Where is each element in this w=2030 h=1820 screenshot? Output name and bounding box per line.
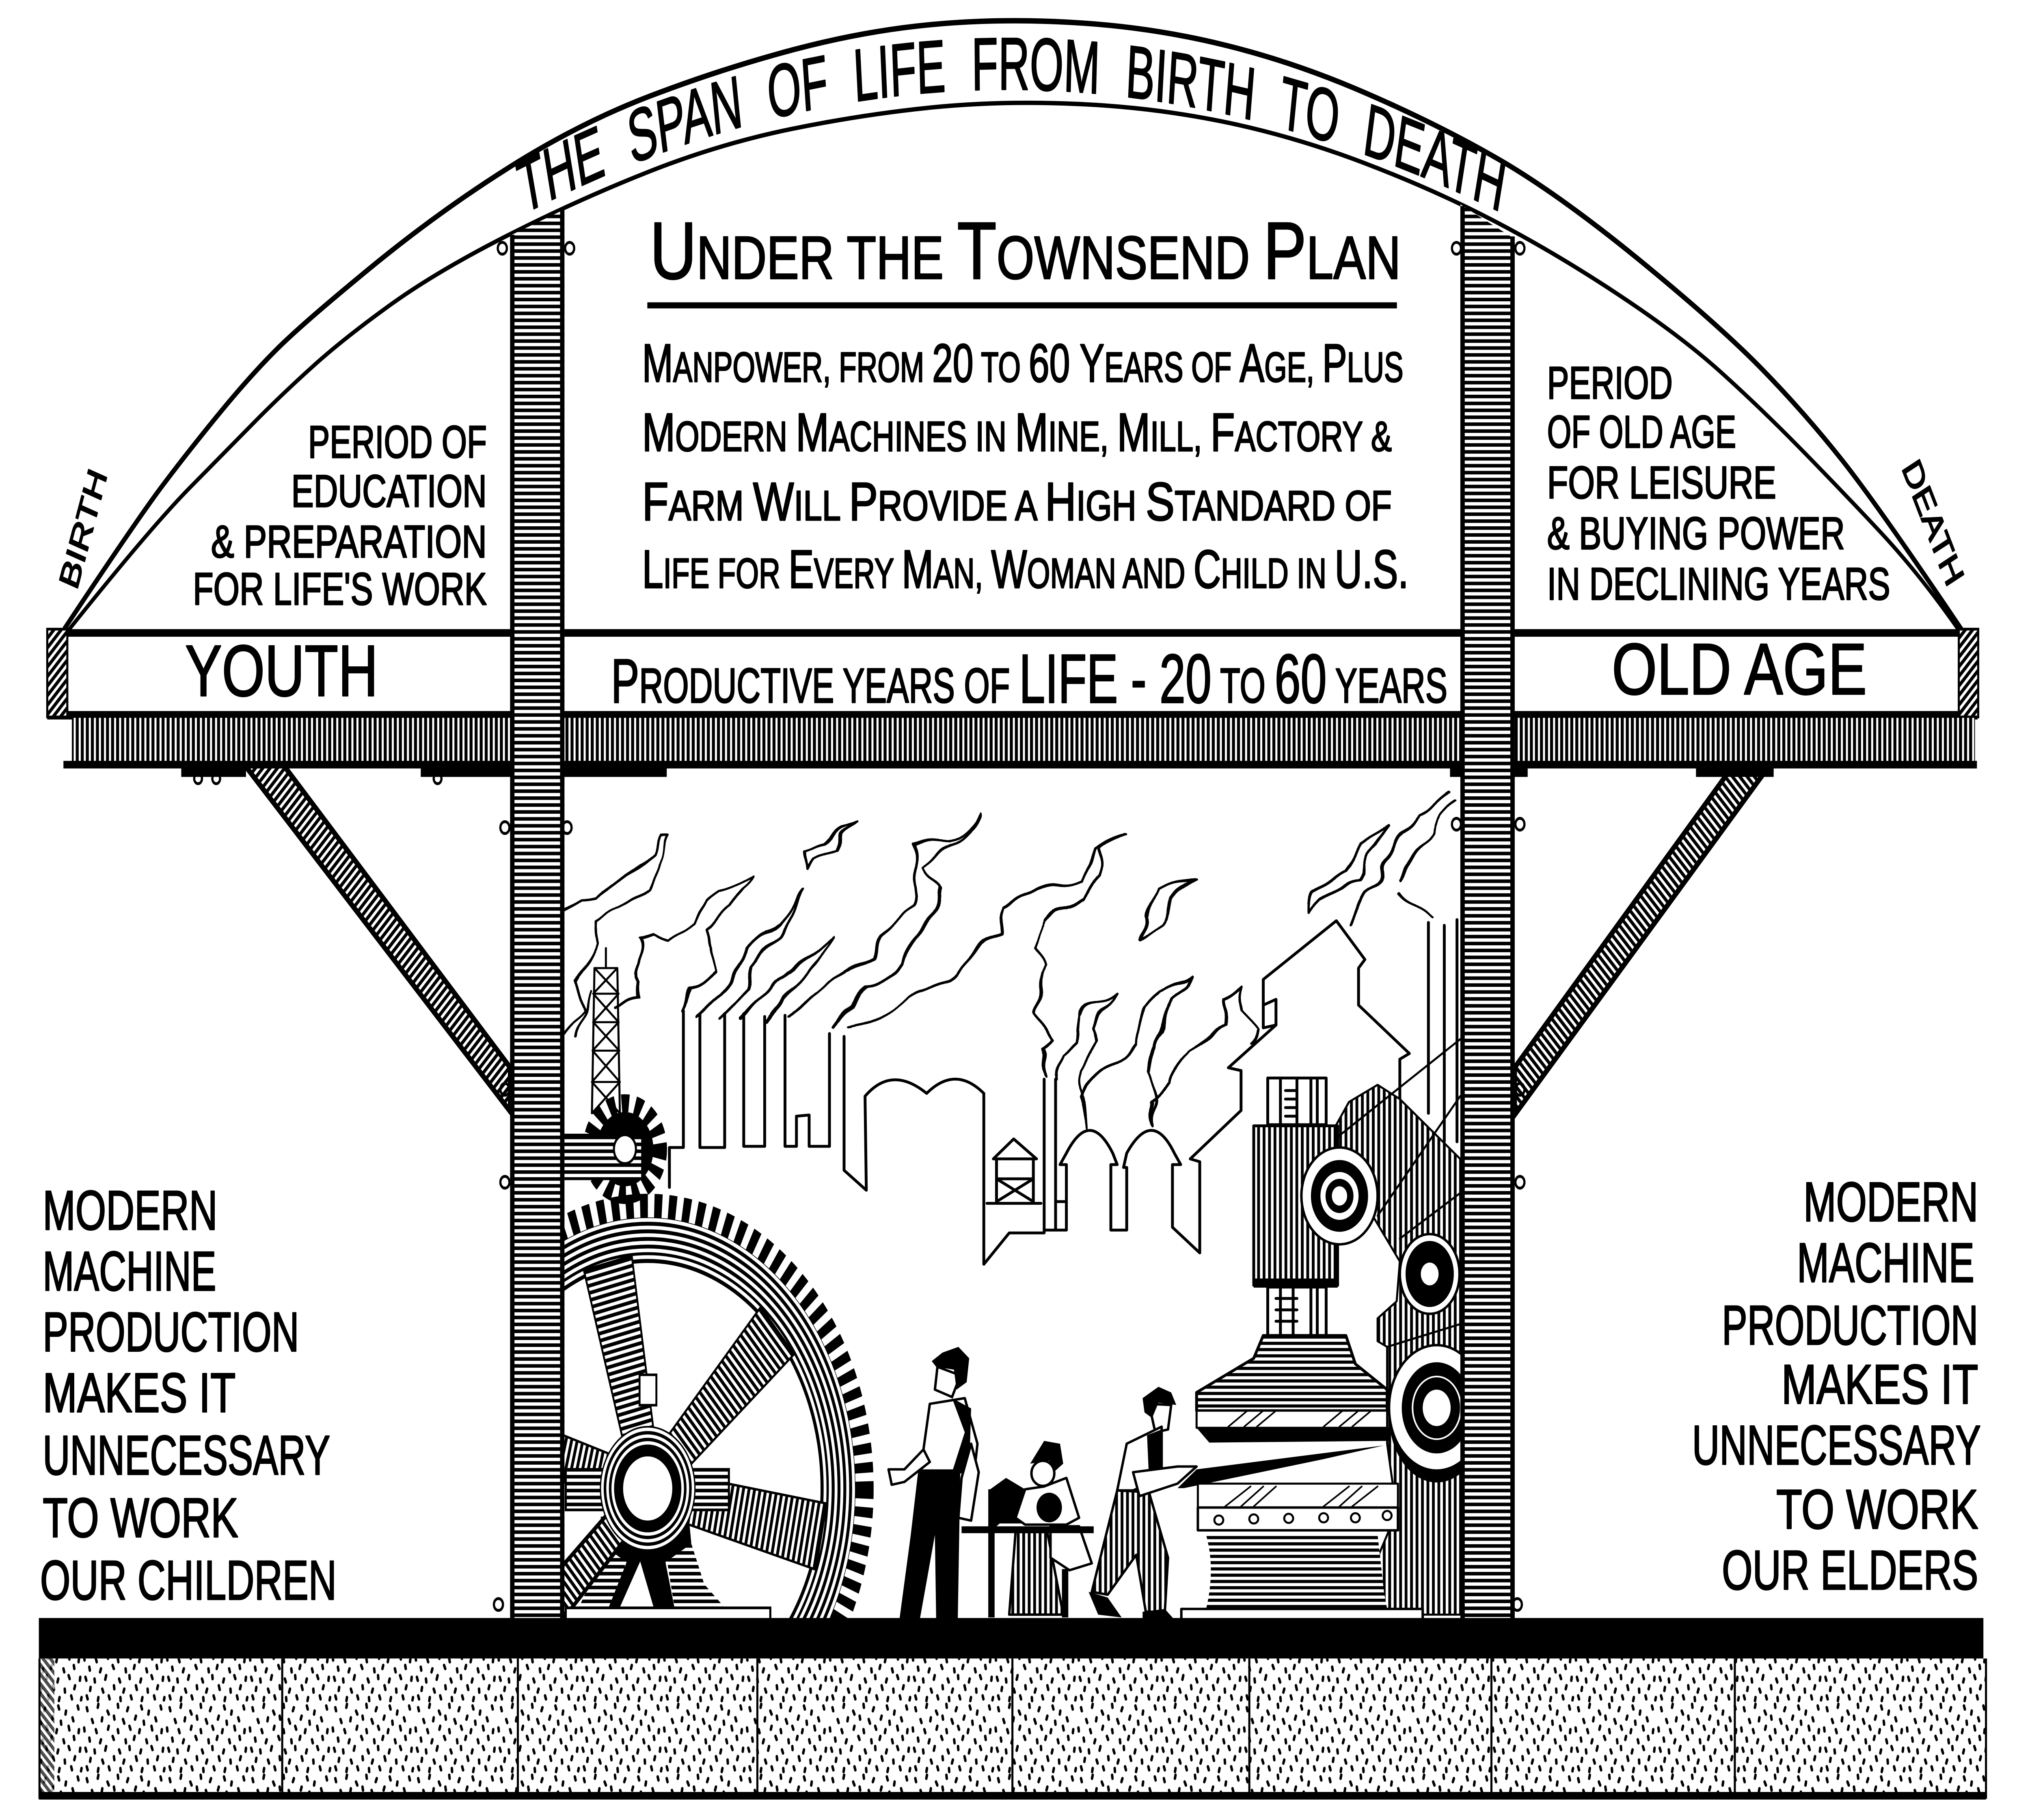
central text block bbox=[642, 333, 1408, 600]
text: period of old age bbox=[1547, 358, 1890, 610]
central text block: MANPOWER, FROM 20 TO 60 YEARS OF AGE, PLUS bbox=[642, 333, 1404, 393]
text: period of old age: FOR LEISURE bbox=[1547, 457, 1776, 508]
text: period of education: FOR LIFE'S WORK bbox=[193, 564, 487, 615]
central text block: FARM WILL PROVIDE A HIGH STANDARD OF bbox=[642, 472, 1392, 532]
press wheels bbox=[1301, 1148, 1484, 1483]
gear spokes bbox=[471, 1256, 827, 1662]
left brace bbox=[243, 763, 510, 1111]
label: birth: BIRTH bbox=[53, 464, 113, 594]
text: period of old age: PERIOD bbox=[1547, 358, 1673, 409]
large gear wheel bbox=[432, 1206, 864, 1770]
right brace bbox=[1515, 763, 1771, 1115]
text: elders note: PRODUCTION bbox=[1722, 1294, 1978, 1356]
text: children note: UNNECESSARY bbox=[43, 1424, 330, 1486]
band: life stages bbox=[47, 629, 1978, 720]
worker standing bbox=[889, 1347, 979, 1620]
gear base plate bbox=[566, 1608, 770, 1621]
concrete foundation bbox=[39, 1658, 1986, 1800]
central text block: MODERN MACHINES IN MINE, MILL, FACTORY & bbox=[642, 403, 1392, 463]
text: elders note: OUR ELDERS bbox=[1722, 1539, 1978, 1601]
central text block: LIFE FOR EVERY MAN, WOMAN AND CHILD IN U.S. bbox=[642, 539, 1408, 600]
beam rivets and brackets bbox=[181, 242, 1774, 1610]
label: death: DEATH bbox=[1896, 453, 1970, 592]
drive belts bbox=[1317, 1039, 1460, 1347]
gear rim bbox=[458, 1240, 838, 1737]
press body bbox=[1177, 1336, 1423, 1620]
heading: under the Townsend plan: UNDER THE TOWNSEND PLAN bbox=[650, 205, 1401, 296]
text: children note: MODERN bbox=[43, 1179, 218, 1241]
text: elders note: MAKES IT bbox=[1782, 1353, 1978, 1416]
text: period of old age: IN DECLINING YEARS bbox=[1547, 559, 1890, 610]
worker pushing metal into press bbox=[1088, 1387, 1196, 1620]
text: elders note: UNNECESSARY bbox=[1692, 1414, 1981, 1476]
text: children note: TO WORK bbox=[43, 1486, 238, 1549]
text: elders note: TO WORK bbox=[1776, 1478, 1978, 1540]
left pillar bbox=[510, 203, 564, 1621]
text: period of education: & PREPARATION bbox=[211, 517, 487, 567]
text: children note: PRODUCTION bbox=[43, 1301, 299, 1363]
smoke plumes bbox=[561, 786, 1454, 1130]
text: period of old age: & BUYING POWER bbox=[1547, 508, 1845, 559]
press cylinder bbox=[1254, 1126, 1338, 1285]
gear pedestal bbox=[579, 1517, 725, 1608]
rear frame of press bbox=[1336, 1085, 1460, 1615]
water tower bbox=[993, 1139, 1037, 1202]
text: elders note: MODERN bbox=[1803, 1171, 1978, 1233]
small gear and arm bbox=[562, 1105, 659, 1193]
text: children note: OUR CHILDREN bbox=[40, 1549, 337, 1611]
text: period of education bbox=[193, 417, 487, 615]
text: children note: MAKES IT bbox=[43, 1362, 235, 1424]
text: elders note: MACHINE bbox=[1797, 1231, 1974, 1294]
heading underline bbox=[647, 303, 1397, 308]
text: period of old age: OF OLD AGE bbox=[1547, 406, 1736, 458]
oil derrick bbox=[592, 948, 620, 1113]
right pillar bbox=[1460, 199, 1515, 1621]
label: old age: OLD AGE bbox=[1612, 629, 1867, 710]
label: productive years: PRODUCTIVE YEARS OF LIFE - 20 TO 60 YEARS bbox=[611, 640, 1447, 718]
factory buildings and chimneys bbox=[669, 920, 1457, 1264]
text: period of education: EDUCATION bbox=[291, 466, 487, 517]
text: children note bbox=[40, 1179, 337, 1611]
woman at sewing machine bbox=[961, 1441, 1094, 1617]
arch: span of life bbox=[65, 21, 1965, 635]
gear hub bbox=[566, 1470, 729, 1510]
ground slab bbox=[39, 1618, 1983, 1658]
title on arch: THE SPAN OF LIFE FROM BIRTH TO DEATH bbox=[512, 22, 1512, 229]
steel beam bbox=[63, 718, 1977, 768]
text: children note: MACHINE bbox=[43, 1240, 216, 1302]
gear teeth bbox=[432, 1206, 864, 1770]
text: period of education: PERIOD OF bbox=[308, 417, 487, 468]
gear key bbox=[639, 1375, 657, 1405]
press column bbox=[1268, 1078, 1326, 1125]
label: youth: YOUTH bbox=[185, 630, 378, 711]
illustration: factory skyline and machines bbox=[561, 786, 1484, 1620]
text: elders note bbox=[1692, 1171, 1981, 1601]
